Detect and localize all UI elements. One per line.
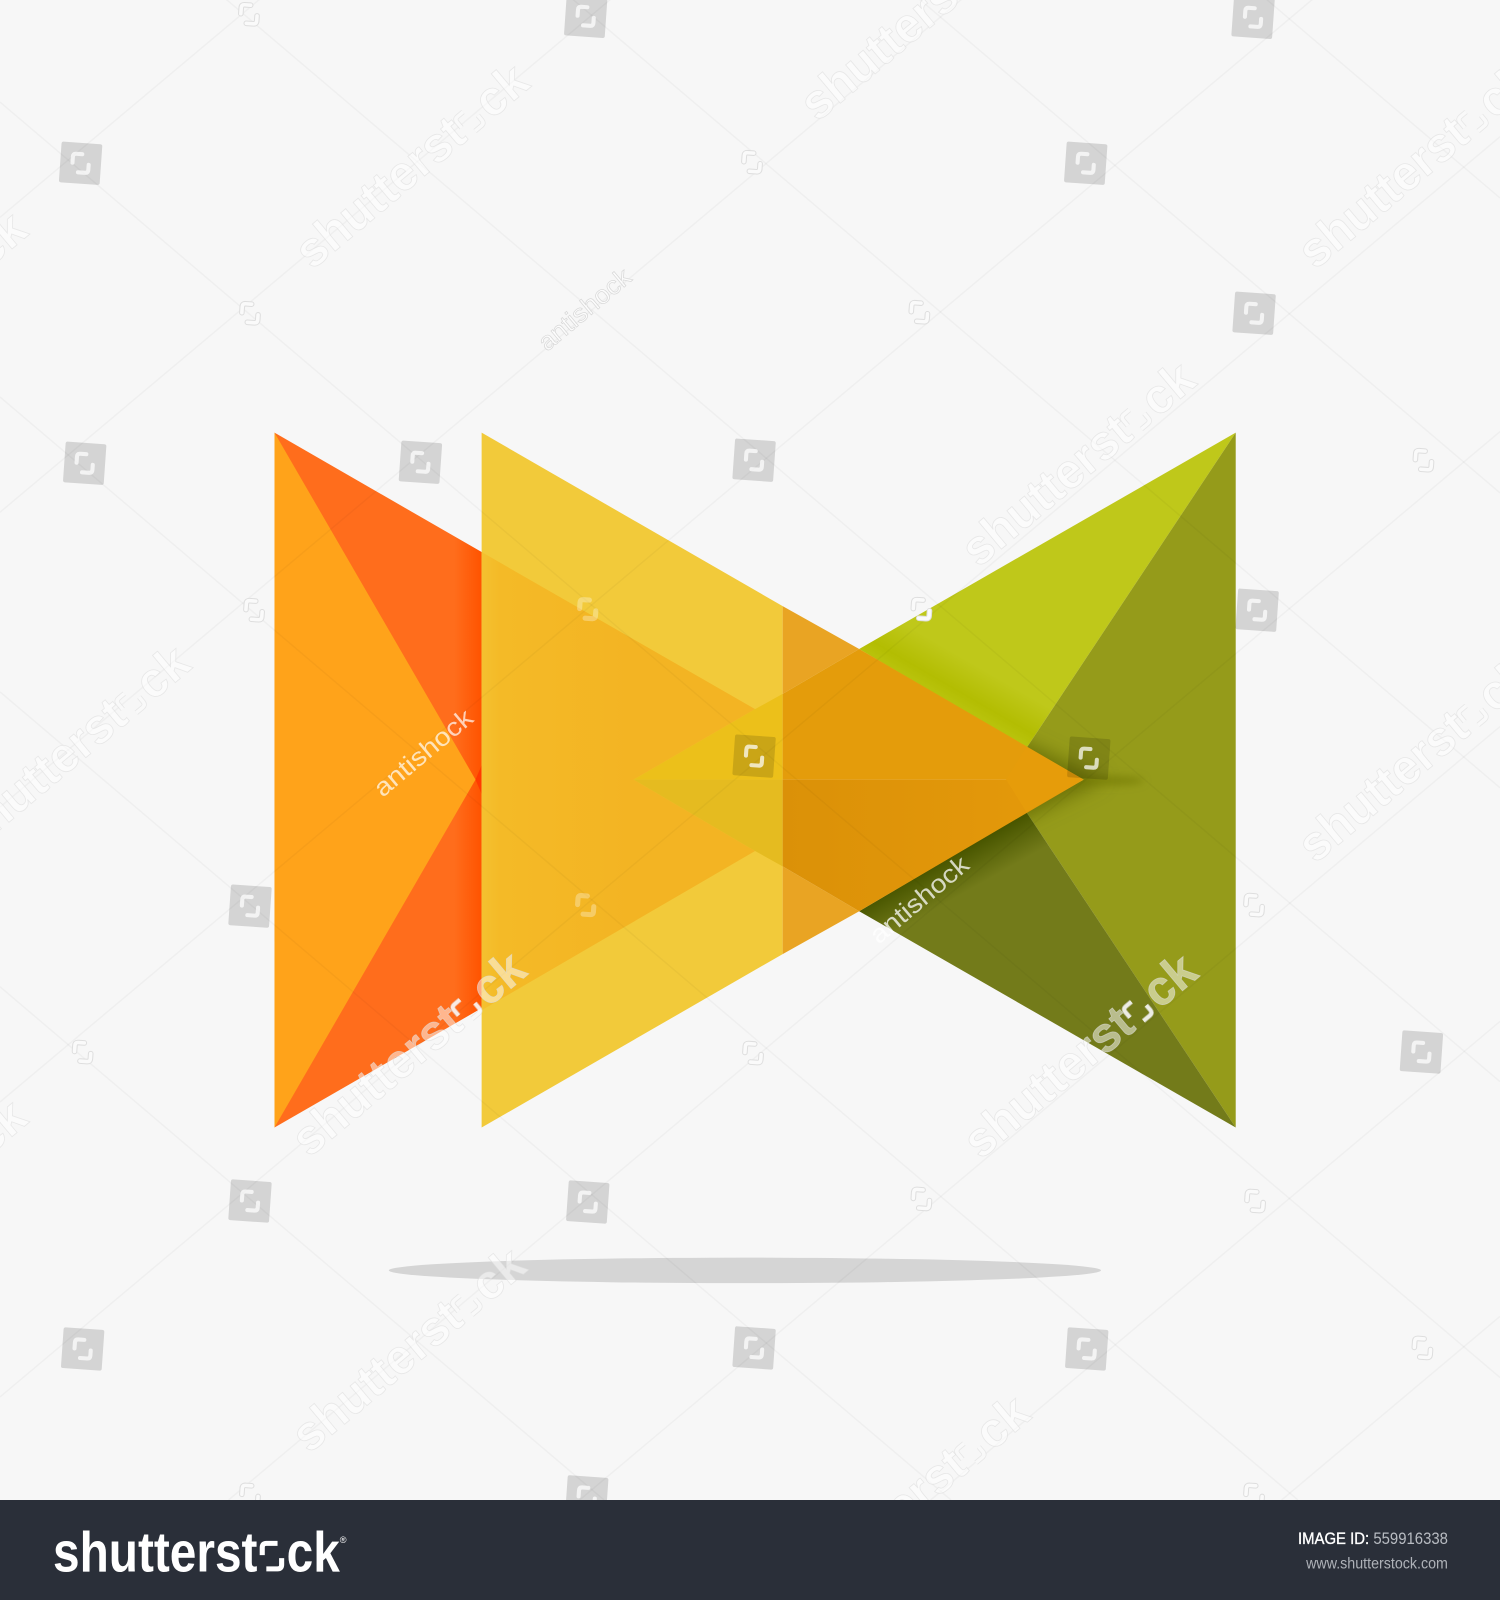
- stock-photo watermarks: shutterstock: [282, 1236, 536, 1463]
- footer logo: shutterstock: [53, 1520, 340, 1583]
- stock-photo watermarks: antishock: [533, 263, 637, 357]
- footer logo: ®: [340, 1535, 347, 1545]
- green triangle: [859, 433, 1236, 1128]
- stock-photo watermarks: erstock: [875, 1384, 1040, 1535]
- website url: www.shutterstock.com: [1305, 1555, 1448, 1572]
- stock-photo watermarks: shutterstock: [951, 351, 1206, 577]
- stock-photo watermarks: shutterstock: [285, 53, 540, 279]
- logo: overlapping triangles: [274, 433, 1236, 1128]
- stock-photo watermarks: shutterstock: [282, 940, 536, 1167]
- stock-photo watermarks: antishock: [369, 704, 479, 803]
- footer band: [0, 1500, 1500, 1600]
- stock-photo watermarks: antishock: [864, 850, 975, 949]
- yellow triangle: [482, 433, 1084, 1128]
- orange triangle: [274, 433, 482, 1128]
- image id: IMAGE ID: 559916338: [1298, 1530, 1448, 1548]
- ground shadow ellipse: [389, 1258, 1101, 1283]
- stock-photo watermarks: shutterstock: [953, 942, 1208, 1169]
